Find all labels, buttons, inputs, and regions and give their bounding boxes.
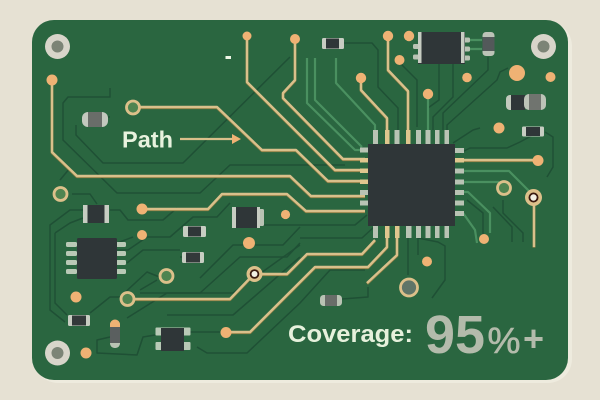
component: vertical resistor bottom [110,320,120,348]
stat: 95%+: % [488,320,520,361]
component: top capacitor [322,38,344,49]
component: capacitor and resistor pair [506,94,546,110]
ring vias [54,101,510,306]
arrow: path pointer [180,134,241,144]
dash mark [226,56,231,59]
gold signal traces [52,36,538,333]
stat: 95%+: 95 [425,305,485,365]
label: Coverage: Coverage: [288,321,413,348]
component: top IC [413,32,470,64]
component: small capacitor centre [183,226,206,237]
component: capacitor centre large [232,207,264,228]
component: left IC [66,238,126,279]
component: resistor left top [82,112,108,127]
mounting holes [45,34,556,366]
component: vertical resistor [482,32,494,56]
green copper traces [307,40,530,243]
stat: 95%+ [425,305,544,365]
component: small capacitor centre lower [182,252,204,263]
component: grey resistor bottom [320,295,342,306]
highlighted vias [246,189,542,282]
component: capacitor left [83,205,109,223]
stat: 95%+: + [523,318,544,359]
main chip with pins [360,130,464,238]
solder pad vias [46,31,556,359]
component: small capacitor right [522,126,544,136]
dark copper traces [50,43,553,355]
label: Path: Path [122,126,173,152]
component: small capacitor bottom left [68,315,90,326]
component: bottom IC [156,328,190,351]
